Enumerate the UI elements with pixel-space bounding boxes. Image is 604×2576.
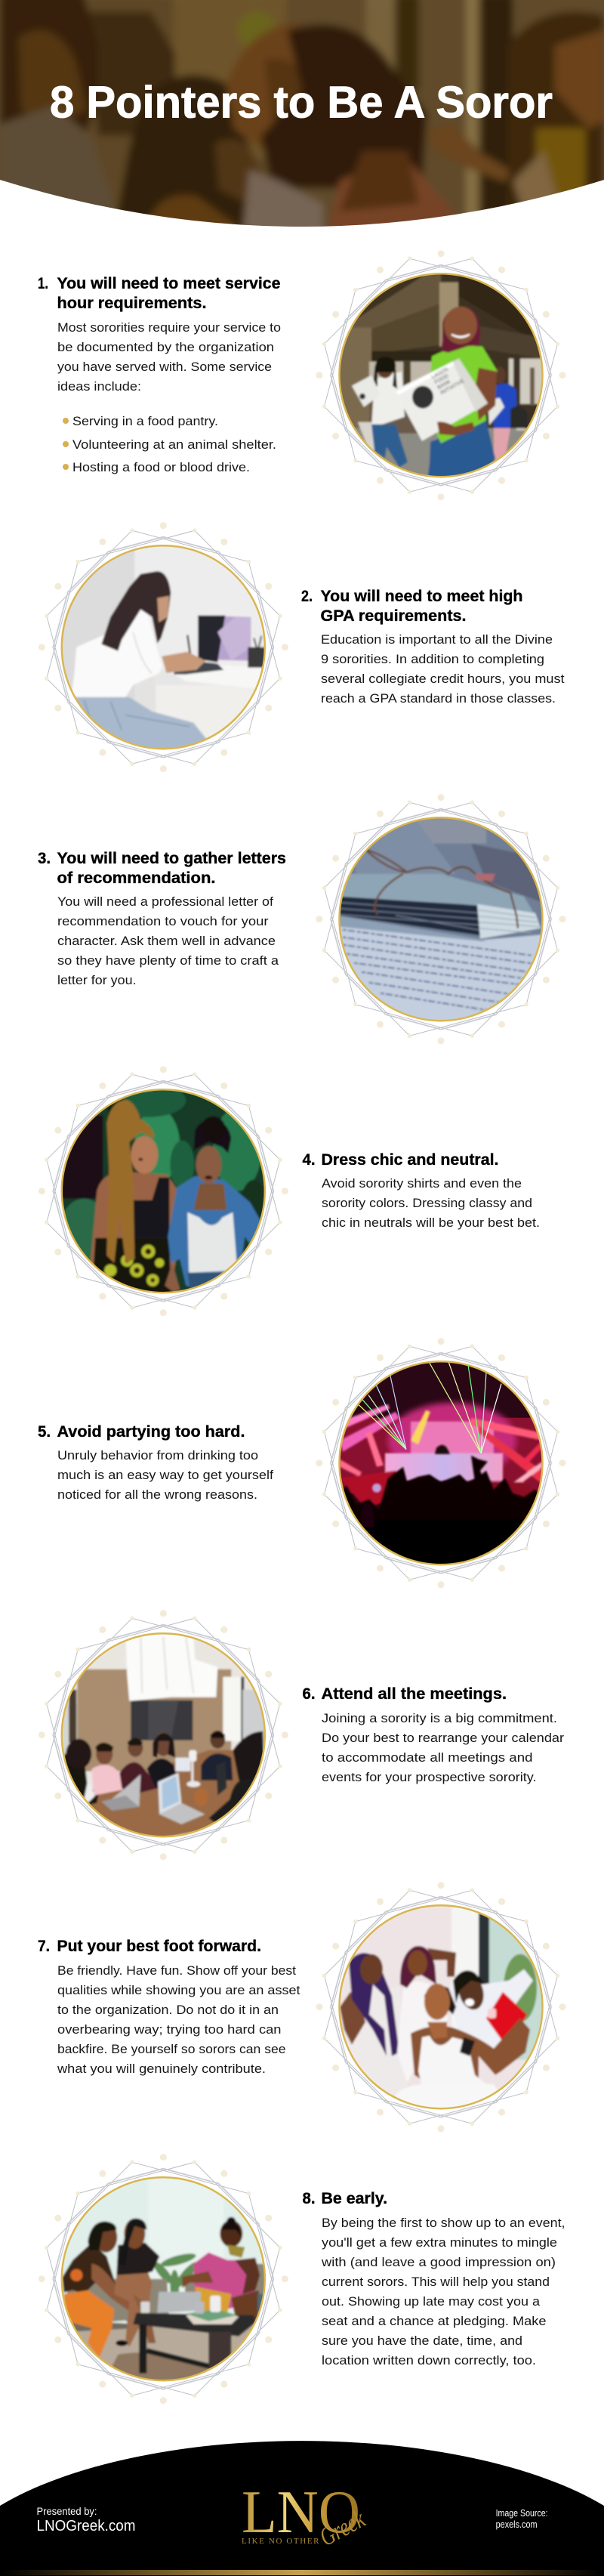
body text 3: letter for you. xyxy=(57,974,136,987)
body text 7: backfire. Be yourself so sorors can see xyxy=(57,2043,285,2056)
header photo: friends laughing, brown tint xyxy=(0,0,604,242)
heading 3: You will need to gather letters xyxy=(57,850,286,867)
bullet list: Volunteering at an animal shelter. xyxy=(72,438,276,452)
heading 3 xyxy=(38,850,286,887)
laptops and props xyxy=(106,1774,140,1807)
photo: two women in front of foliage xyxy=(57,1084,269,1297)
star frame 5 xyxy=(316,1338,566,1588)
left volunteer xyxy=(371,372,405,428)
body text 5: Unruly behavior from drinking too xyxy=(57,1449,258,1463)
heading 4: 4. xyxy=(302,1151,316,1169)
photo: three women talking around a coffee table xyxy=(57,2173,269,2385)
heading 1 xyxy=(38,275,281,312)
pillow xyxy=(396,2083,498,2108)
photo: volunteers carrying food bank boxes: FOOD xyxy=(434,373,450,385)
body text 6: Joining a sorority is a big commitment. xyxy=(322,1712,557,1725)
bullet list xyxy=(63,415,276,474)
back woman xyxy=(397,1981,448,2083)
body text 2: reach a GPA standard in those classes. xyxy=(321,692,556,706)
gold ring xyxy=(62,2177,265,2380)
right volunteer xyxy=(494,384,516,428)
body text 8: location written down correctly, too. xyxy=(322,2354,536,2368)
body text 8: seat and a chance at pledging. Make xyxy=(322,2315,547,2328)
curtain xyxy=(125,1634,217,1701)
body text 1: be documented by the organization xyxy=(57,341,274,354)
body text 8: out. Showing up late may cost you a xyxy=(322,2295,541,2309)
heading 8: Be early. xyxy=(322,2190,387,2207)
body text 1 xyxy=(57,321,281,394)
body text 2: several collegiate credit hours, you must xyxy=(321,672,565,686)
left woman xyxy=(62,2243,116,2294)
star frame 3 xyxy=(316,794,566,1044)
logo: LNO Like No Other Greek: LIKE NO OTHER xyxy=(242,2537,319,2546)
red phone xyxy=(485,1991,528,2041)
body text 7: qualities while showing you are an asset xyxy=(57,1984,300,1997)
panel: pointer 1 xyxy=(38,250,566,500)
heading 7: 7. xyxy=(38,1938,50,1955)
body text 4: Avoid sorority shirts and even the xyxy=(322,1177,522,1191)
photo: concert crowd with lasers xyxy=(335,1357,547,1573)
table xyxy=(89,1749,263,1836)
panel: pointer 6 xyxy=(39,1610,565,1860)
presented by: Presented by: xyxy=(36,2505,97,2517)
main volunteer xyxy=(427,421,495,481)
heading 2: GPA requirements. xyxy=(320,607,467,625)
body text 5: much is an easy way to get yourself xyxy=(57,1469,273,1482)
heading 5: 5. xyxy=(38,1423,51,1441)
body text 7: what you will genuinely contribute. xyxy=(57,2062,266,2076)
body text 7 xyxy=(57,1964,300,2076)
panel: pointer 3 xyxy=(38,794,566,1044)
middle woman xyxy=(116,2243,159,2275)
photo: bundle of tied letters xyxy=(335,814,547,1025)
body text 5 xyxy=(57,1449,273,1502)
body text 7: Be friendly. Have fun. Show off your best xyxy=(57,1964,296,1978)
image source xyxy=(496,2507,548,2530)
photo: volunteers carrying food bank boxes xyxy=(335,270,547,481)
panel: pointer 4 xyxy=(39,1066,540,1316)
heading 1: 1. xyxy=(38,275,48,292)
heading 4: Dress chic and neutral. xyxy=(322,1151,498,1169)
bullet list: Serving in a food pantry. xyxy=(72,415,218,428)
body text 8: you'll get a few extra minutes to mingle xyxy=(322,2236,557,2250)
plant xyxy=(153,2253,197,2293)
body text 2: Education is important to all the Divine xyxy=(321,633,553,647)
body text 3: You will need a professional letter of xyxy=(57,895,273,909)
star frame 6 xyxy=(39,1610,288,1860)
photo: women in a meeting room xyxy=(57,1629,269,1841)
photo: volunteers carrying food bank boxes: BANK xyxy=(436,379,452,391)
body text 6 xyxy=(322,1712,565,1784)
body text 7: overbearing way; trying too hard can xyxy=(57,2023,281,2037)
star frame 7 xyxy=(316,1882,566,2132)
jeans xyxy=(75,697,208,753)
gold ring xyxy=(340,817,542,1021)
body text 4: sorority colors. Dressing classy and xyxy=(322,1197,532,1210)
logo: LNO Like No Other Greek: LNO xyxy=(242,2479,360,2546)
footer black dome xyxy=(0,2441,604,2576)
selfie-taking woman on the right xyxy=(450,1969,533,2052)
gold ring xyxy=(340,1905,542,2108)
heading 3: 3. xyxy=(38,850,51,867)
laptop and table xyxy=(157,2292,201,2313)
heading 6: 6. xyxy=(302,1685,316,1703)
gold ring xyxy=(62,545,265,749)
right woman xyxy=(168,1176,265,1293)
heading 1: hour requirements. xyxy=(57,295,207,312)
photo: volunteers carrying food bank boxes: LAGOS xyxy=(431,366,449,380)
body text 8: sure you have the date, time, and xyxy=(322,2334,522,2348)
body text 8: current sorors. This will help you stand xyxy=(322,2275,550,2289)
heading 2: 2. xyxy=(301,588,313,605)
body text 2 xyxy=(321,633,565,706)
photo: volunteers carrying food bank boxes: INITIATIVE xyxy=(439,378,465,396)
presented by: LNOGreek.com xyxy=(36,2518,136,2534)
heading 3: of recommendation. xyxy=(57,869,216,887)
panel: pointer 2 xyxy=(39,522,565,772)
hair xyxy=(101,571,171,651)
left woman xyxy=(89,1171,178,1270)
logo: LNO Like No Other Greek: Greek xyxy=(315,2505,370,2552)
body text 8: with (and leave a good impression on) xyxy=(321,2256,556,2269)
white blouse xyxy=(71,610,162,697)
body text 6: events for your prospective sorority. xyxy=(322,1771,536,1784)
bullet list: Hosting a food or blood drive. xyxy=(72,461,250,474)
body text 4: chic in neutrals will be your best bet. xyxy=(322,1216,540,1230)
right woman xyxy=(193,2253,255,2313)
panel: footer xyxy=(0,2441,604,2576)
heading 8: 8. xyxy=(302,2190,316,2207)
panel: pointer 5 xyxy=(38,1338,566,1588)
body text 3: so they have plenty of time to craft a xyxy=(57,954,279,968)
body text 4 xyxy=(322,1177,540,1230)
gold ring xyxy=(340,273,542,477)
photo: woman studying at a desk xyxy=(57,542,269,753)
presented by xyxy=(36,2505,136,2534)
body text 1: Most sororities require your service to xyxy=(57,321,281,335)
body text 6: Do your best to rearrange your calendar xyxy=(322,1731,565,1745)
image source: Image Source: xyxy=(496,2507,548,2519)
gold ring xyxy=(340,1361,542,1564)
panel: header photo with title xyxy=(0,0,604,242)
body text 5: noticed for all the wrong reasons. xyxy=(57,1488,257,1502)
gold ring xyxy=(62,1089,265,1293)
body text 3: recommendation to vouch for your xyxy=(57,915,269,928)
body text 3 xyxy=(57,895,279,987)
body text 8: By being the first to show up to an event, xyxy=(322,2216,565,2230)
body text 1: you have served with. Some service xyxy=(57,360,272,374)
body text 3: character. Ask them well in advance xyxy=(57,934,276,948)
sofas xyxy=(65,2279,169,2328)
heading 5: Avoid partying too hard. xyxy=(57,1423,245,1441)
heading 2: You will need to meet high xyxy=(320,588,522,605)
gold footer line xyxy=(0,2570,604,2575)
heading 1: You will need to meet service xyxy=(57,275,281,292)
body text 2: 9 sororities. In addition to completing xyxy=(321,653,544,666)
front woman xyxy=(409,2017,532,2079)
heading 2 xyxy=(301,588,522,625)
people xyxy=(65,1753,100,1805)
panel: pointer 8 xyxy=(39,2154,565,2404)
gold ring xyxy=(62,1633,265,1836)
photo: four friends taking a selfie xyxy=(335,1901,547,2113)
star frame 8 xyxy=(39,2154,288,2404)
left woman xyxy=(343,1988,407,2105)
panel: pointer 7 xyxy=(38,1882,566,2132)
body text 1: ideas include: xyxy=(57,380,141,394)
body text 6: to accommodate all meetings and xyxy=(322,1751,533,1765)
body text 7: to the organization. Do not do it in an xyxy=(57,2003,279,2017)
title: 8 Pointers to Be A Soror xyxy=(50,77,553,127)
star frame 4 xyxy=(39,1066,288,1316)
image source: pexels.com xyxy=(496,2519,538,2530)
body text 8 xyxy=(321,2216,565,2368)
star frame 2 xyxy=(39,522,288,772)
heading 7: Put your best foot forward. xyxy=(57,1938,261,1955)
heading 6: Attend all the meetings. xyxy=(322,1685,507,1703)
star frame 1 xyxy=(316,250,566,500)
